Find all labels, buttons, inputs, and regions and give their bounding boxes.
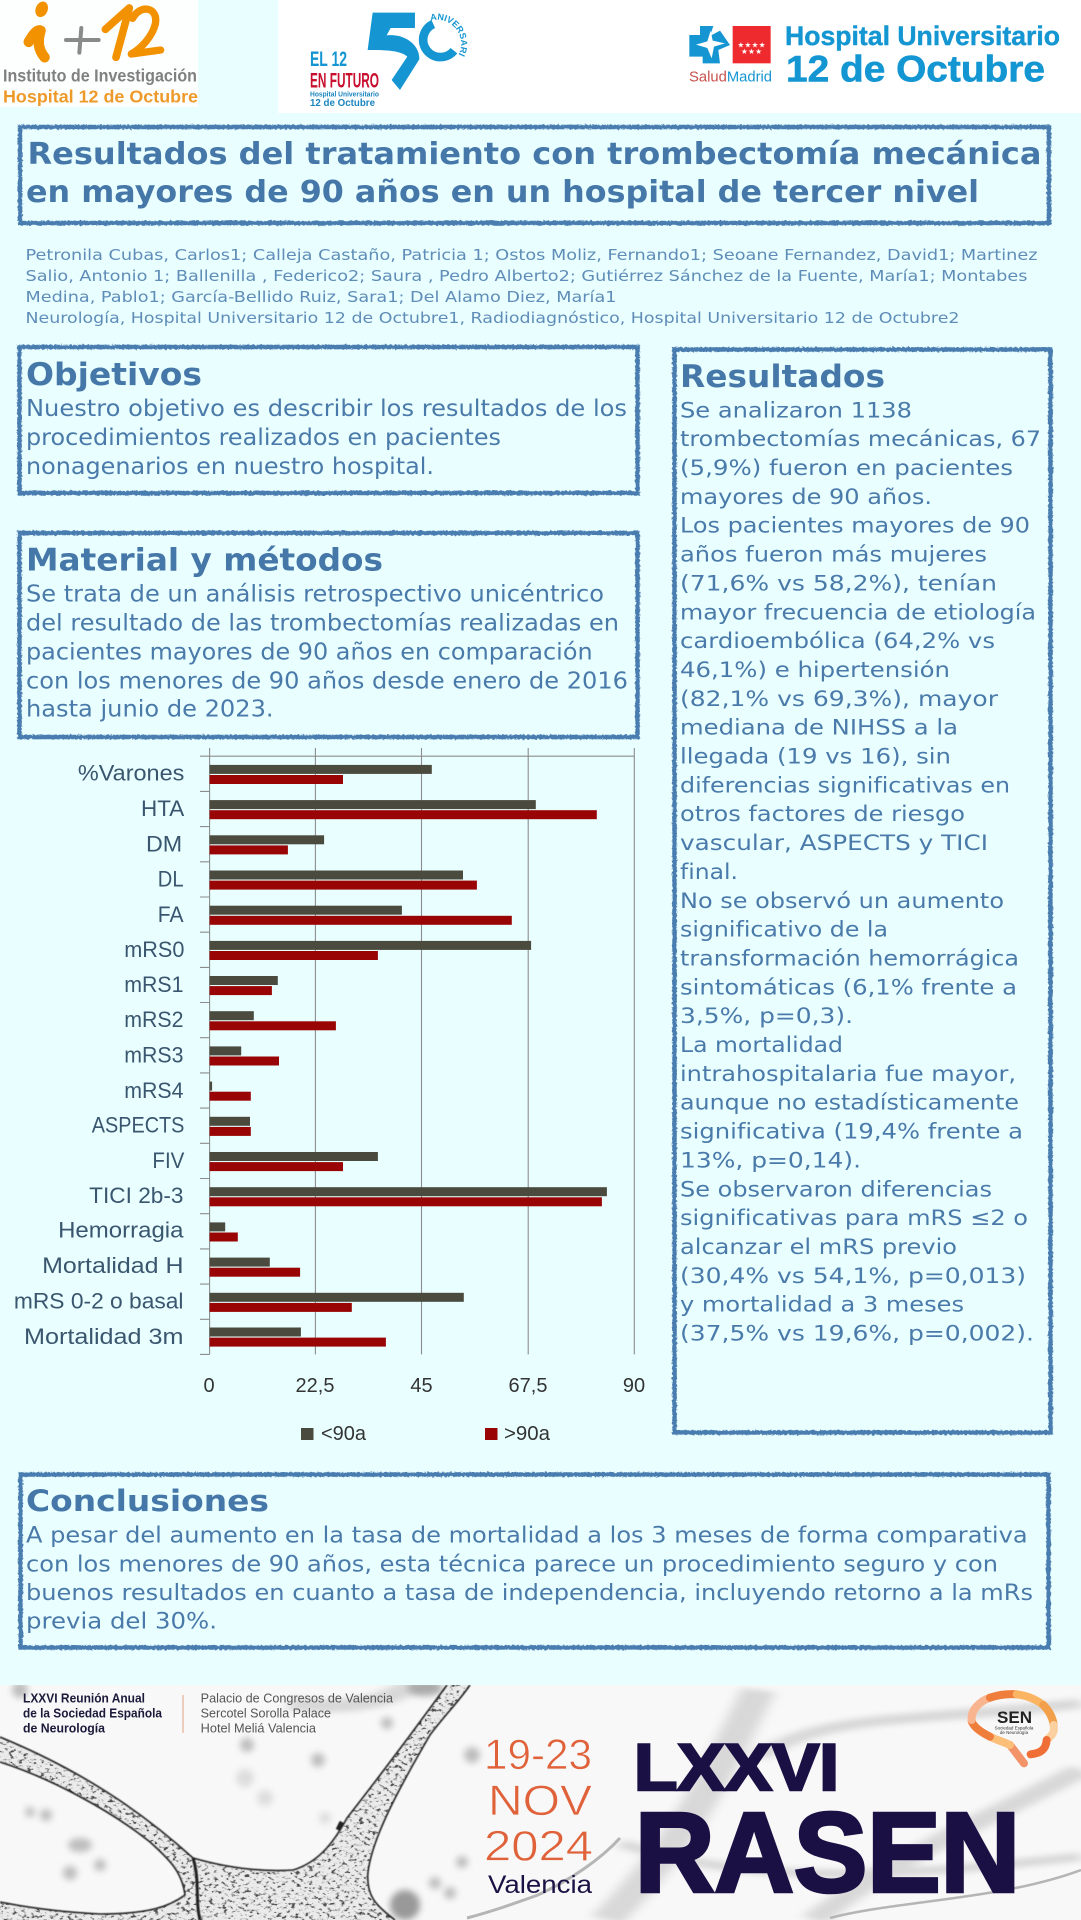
text: resultados body: alcanzar el mRS previo — [680, 1235, 957, 1260]
category labels: DM — [146, 832, 182, 857]
text: resultados body: llegada (19 vs 16), sin — [680, 744, 951, 770]
text: resultados body: Se observaron diferencias — [680, 1177, 992, 1202]
category labels: FA — [158, 902, 184, 927]
text: resultados body: Los pacientes mayores de 90 — [680, 514, 1030, 539]
bars: over 90 — [210, 775, 602, 1347]
text: material y métodos body — [26, 582, 628, 723]
category labels: HTA — [141, 796, 185, 821]
text: resultados body: (37,5% vs 19,6%, p=0,002). — [680, 1322, 1034, 1346]
logo: Hospital Universitario 12 de Octubre, SaludMadrid: Hospital Universitario — [785, 21, 1060, 51]
bars: under 90 — [210, 765, 607, 1336]
category labels: Mortalidad H — [42, 1253, 183, 1278]
text: material y métodos body: Se trata de un análisis retrospectivo unicéntrico — [26, 582, 604, 608]
legend — [301, 1423, 551, 1445]
logo: Hospital Universitario 12 de Octubre, SaludMadrid: ★★★ — [741, 47, 762, 56]
panel: objetivos — [20, 347, 638, 493]
logo: Instituto de Investigación i+12: Hospital 12 de Octubre — [3, 87, 198, 107]
value axis labels: 22,5 — [296, 1375, 334, 1397]
banner: LXXVI RASEN congress — [0, 1680, 1081, 1920]
heading: objetivos: Objetivos — [26, 357, 202, 393]
text: dates: NOV — [488, 1777, 592, 1825]
text: resultados body: transformación hemorrágica — [680, 946, 1019, 972]
text: congress name: LXXVI Reunión Anual — [23, 1692, 145, 1706]
text: congress name: de Neurología — [23, 1721, 106, 1735]
category labels: ASPECTS — [92, 1113, 184, 1138]
text: resultados body: (5,9%) fueron en pacientes — [680, 456, 1013, 481]
logo: SEN: SEN — [997, 1708, 1032, 1727]
text: conclusiones body: previa del 30%. — [26, 1609, 217, 1634]
text: venues: Sercotel Sorolla Palace — [201, 1707, 331, 1721]
neuron illustration — [0, 1680, 1081, 1920]
text: resultados body: cardioembólica (64,2% vs — [680, 629, 995, 654]
text: conclusiones body: buenos resultados en cuanto a tasa de independencia, incluyendo retorno a la mRs — [26, 1581, 1033, 1606]
text: dates: 2024 — [484, 1823, 593, 1871]
logo: El 12 en futuro, 50 aniversario: Hospital Universitario — [310, 89, 379, 98]
logo: Instituto de Investigación i+12: Instituto de Investigación — [3, 66, 197, 86]
authors and affiliations: Salio, Antonio 1; Ballenilla , Federico2; Saura , Pedro Alberto2; Gutiérrez Sánchez de la Fuente, María1; Montabes — [26, 267, 1028, 285]
white header band — [278, 0, 1081, 113]
category labels: mRS3 — [124, 1042, 184, 1067]
category labels: DL — [158, 867, 184, 892]
value axis labels: 90 — [623, 1375, 645, 1397]
logo: SEN: de Neurología — [1000, 1730, 1029, 1735]
category labels: FIV — [152, 1148, 185, 1173]
legend: <90a — [321, 1423, 367, 1445]
category labels: Hemorragia — [58, 1217, 184, 1242]
text: material y métodos body: del resultado de las trombectomías realizadas en — [26, 611, 619, 637]
neuron body and branches — [0, 1685, 470, 1920]
text: city: Valencia — [488, 1871, 592, 1899]
heading: material y métodos: Material y métodos — [26, 543, 383, 579]
text: objetivos body: nonagenarios en nuestro hospital. — [26, 454, 434, 480]
logo: El 12 en futuro, 50 aniversario — [310, 12, 468, 109]
text: resultados body: diferencias significativas en — [680, 773, 1010, 798]
logo: Hospital Universitario 12 de Octubre, SaludMadrid: 12 de Octubre — [786, 49, 1045, 90]
category labels: mRS1 — [124, 972, 184, 997]
text: dates — [484, 1731, 593, 1871]
text: congress name — [23, 1692, 163, 1735]
logo: Hospital Universitario 12 de Octubre, SaludMadrid: SaludMadrid — [689, 69, 772, 86]
text: resultados body: sintomáticas (6,1% frente a — [680, 975, 1017, 1000]
text: resultados body: y mortalidad a 3 meses — [680, 1293, 964, 1318]
logo: El 12 en futuro, 50 aniversario: 12 de Octubre — [310, 97, 375, 109]
value axis labels: 45 — [410, 1375, 433, 1397]
value axis labels — [203, 1375, 645, 1397]
title panel — [20, 127, 1049, 223]
logo: Hospital Universitario 12 de Octubre, SaludMadrid — [689, 21, 1060, 90]
text: objetivos body: procedimientos realizados en pacientes — [26, 425, 501, 451]
category labels: mRS0 — [124, 937, 184, 962]
text: resultados body: aunque no estadísticamente — [680, 1091, 1019, 1116]
authors and affiliations: Neurología, Hospital Universitario 12 de Octubre1, Radiodiagnóstico, Hospital Universitario 12 de Octubre2 — [26, 309, 960, 327]
text: resultados body: mayor frecuencia de etiología — [680, 600, 1036, 625]
text: resultados body: trombectomías mecánicas, 67 — [680, 427, 1041, 452]
text: resultados body: (30,4% vs 54,1%, p=0,013) — [680, 1264, 1026, 1289]
text: resultados body: Se analizaron 1138 — [680, 398, 912, 423]
text: resultados body: 3,5%, p=0,3). — [680, 1004, 853, 1029]
text: resultados body: No se observó un aumento — [680, 889, 1004, 914]
text: resultados body: otros factores de riesgo — [680, 802, 965, 827]
title panel: Resultados del tratamiento con trombectomía mecánica — [28, 137, 1042, 172]
text: resultados body: significativas para mRS ≤2 o — [680, 1206, 1028, 1231]
category labels — [14, 760, 185, 1349]
category labels: mRS4 — [124, 1078, 184, 1103]
authors and affiliations: Medina, Pablo1; García-Bellido Ruiz, Sara1; Del Alamo Diez, María1 — [26, 288, 616, 306]
text: conclusiones body — [26, 1524, 1033, 1634]
text: material y métodos body: pacientes mayores de 90 años en comparación — [26, 639, 593, 665]
legend: >90a — [504, 1423, 551, 1445]
text: resultados body: final. — [680, 860, 738, 885]
text: LXXVI: LXXVI — [634, 1730, 839, 1804]
logo: Hospital Universitario 12 de Octubre, SaludMadrid: ★★★★ — [737, 40, 766, 50]
text: resultados body: vascular, ASPECTS y TICI — [680, 831, 988, 856]
bar chart — [14, 748, 645, 1445]
text: congress name: de la Sociedad Española — [23, 1707, 163, 1721]
authors and affiliations — [26, 246, 1038, 327]
text: venues — [201, 1692, 393, 1735]
logo: SEN — [972, 1694, 1054, 1763]
category labels: mRS 0-2 o basal — [14, 1288, 184, 1314]
panel: conclusiones — [20, 1474, 1048, 1648]
category labels: mRS2 — [124, 1007, 184, 1032]
text: resultados body: mediana de NIHSS a la — [680, 716, 958, 741]
text: objetivos body — [26, 396, 627, 480]
text: conclusiones body: A pesar del aumento en la tasa de mortalidad a los 3 meses de forma comparativa — [26, 1524, 1028, 1549]
text: resultados body: (82,1% vs 69,3%), mayor — [680, 687, 998, 712]
text: resultados body: (71,6% vs 58,2%), tenían — [680, 571, 997, 596]
category labels: %Varones — [78, 760, 184, 786]
category labels: Mortalidad 3m — [24, 1324, 184, 1349]
heading: conclusiones: Conclusiones — [26, 1484, 269, 1518]
text: resultados body: 13%, p=0,14). — [680, 1148, 861, 1173]
value axis labels: 0 — [203, 1375, 215, 1397]
text: material y métodos body: hasta junio de 2023. — [26, 697, 274, 723]
text: resultados body: significativa (19,4% frente a — [680, 1120, 1023, 1145]
title panel: en mayores de 90 años en un hospital de tercer nivel — [26, 175, 979, 210]
text: resultados body: intrahospitalaria fue mayor, — [680, 1062, 1016, 1087]
heading: resultados: Resultados — [680, 359, 885, 395]
value axis labels: 67,5 — [509, 1375, 547, 1397]
text: resultados body: significativo de la — [680, 918, 888, 943]
text: resultados body: años fueron más mujeres — [680, 543, 987, 568]
category labels: TICI 2b-3 — [89, 1183, 184, 1208]
text: material y métodos body: con los menores de 90 años desde enero de 2016 — [26, 668, 628, 694]
text: resultados body: La mortalidad — [680, 1033, 843, 1058]
authors and affiliations: Petronila Cubas, Carlos1; Calleja Castaño, Patricia 1; Ostos Moliz, Fernando1; Seoane Fernandez, David1; Martinez — [26, 246, 1038, 264]
logo: SEN: Sociedad Española — [995, 1726, 1034, 1730]
panel: material y métodos — [20, 533, 638, 737]
text: resultados body: mayores de 90 años. — [680, 485, 932, 510]
text: conclusiones body: con los menores de 90 años, esta técnica parece un procedimiento seguro y con — [26, 1553, 998, 1578]
text: venues: Palacio de Congresos de Valencia — [201, 1692, 393, 1706]
text: objetivos body: Nuestro objetivo es describir los resultados de los — [26, 396, 627, 422]
logo: El 12 en futuro, 50 aniversario: EL 12 — [310, 48, 347, 71]
text: resultados body: 46,1%) e hipertensión — [680, 658, 950, 683]
logo: Instituto de Investigación i+12 — [0, 0, 198, 107]
panel: resultados — [674, 350, 1050, 1432]
logo: El 12 en futuro, 50 aniversario: EN FUTURO — [310, 69, 379, 92]
text: RASEN: RASEN — [635, 1790, 1020, 1916]
text: dates: 19-23 — [484, 1731, 592, 1779]
faint distant branch — [467, 1838, 620, 1918]
text: venues: Hotel Meliá Valencia — [201, 1721, 316, 1735]
text: resultados body — [680, 398, 1041, 1346]
